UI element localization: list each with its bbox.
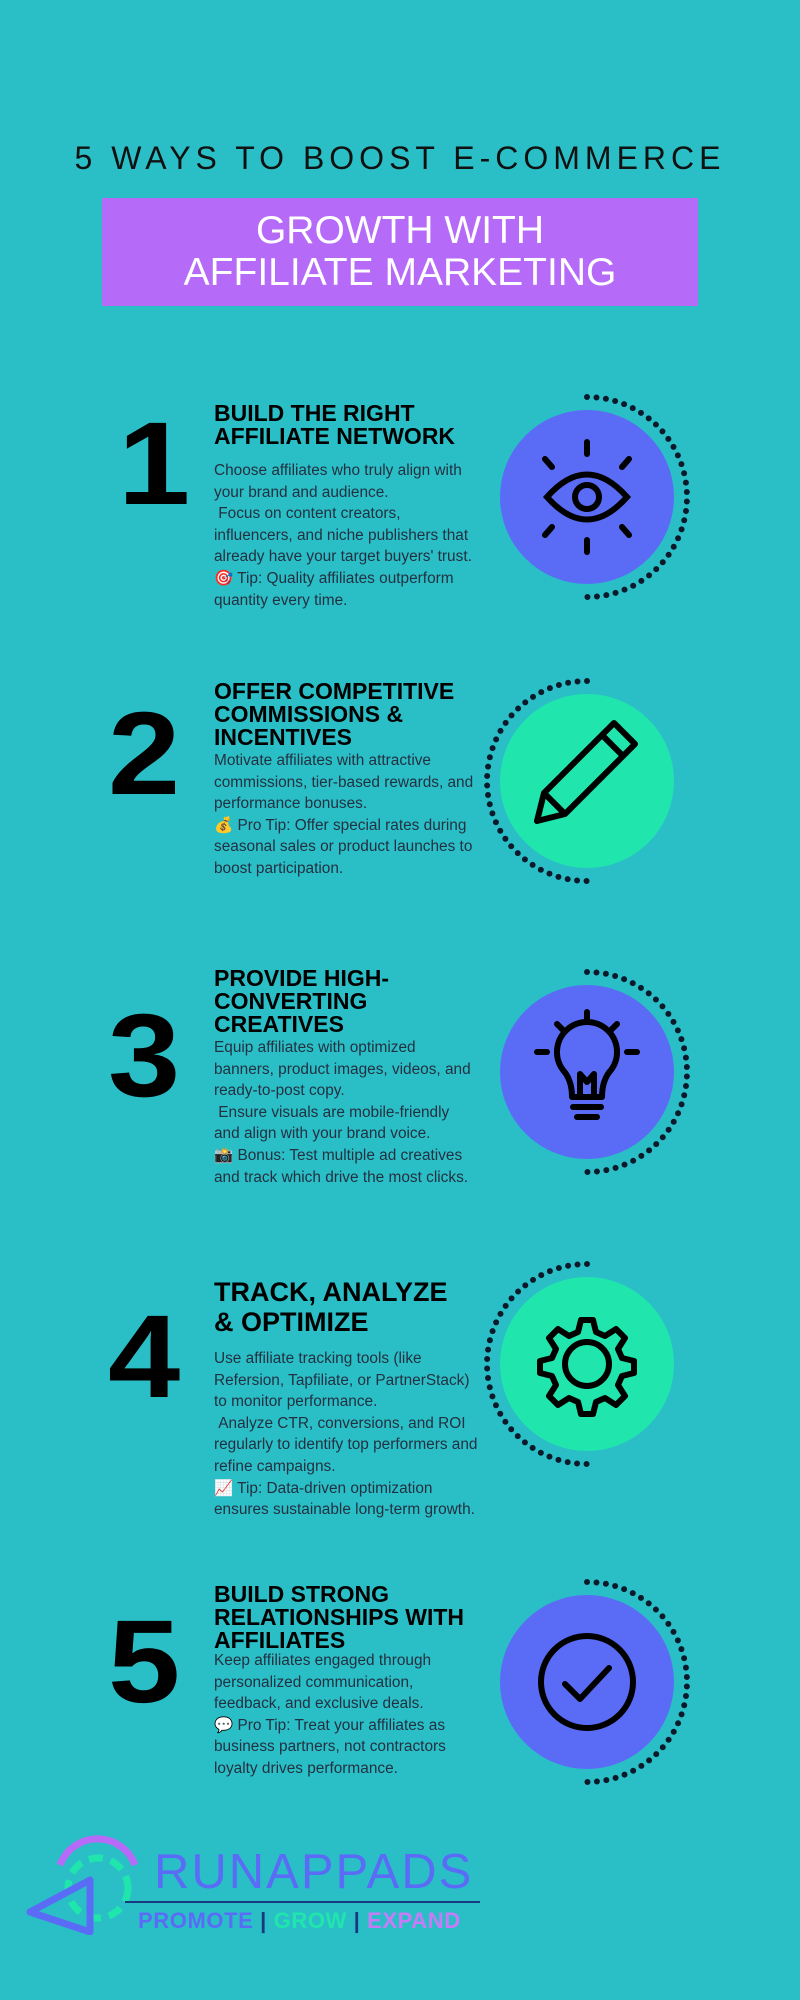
number 3: 3 <box>108 990 180 1122</box>
heading 5: AFFILIATES <box>214 1627 345 1653</box>
heading 5: RELATIONSHIPS WITH <box>214 1604 464 1630</box>
body 1: 🎯 Tip: Quality affiliates outperform quantity every time. <box>214 570 454 609</box>
section 1 <box>118 394 690 609</box>
heading 3 <box>214 965 389 1037</box>
title banner <box>102 198 698 306</box>
title banner: AFFILIATE MARKETING <box>184 251 616 294</box>
logo <box>26 1835 480 1935</box>
body 4: Use affiliate tracking tools (like Refersion, Tapfiliate, or PartnerStack) to monitor performance. <box>214 1350 470 1410</box>
heading 1: AFFILIATE NETWORK <box>214 423 455 449</box>
body 4 <box>214 1350 477 1518</box>
heading 2: OFFER COMPETITIVE <box>214 678 454 704</box>
logo wordmark: RUNAPPADS <box>154 1845 473 1899</box>
number 4: 4 <box>108 1291 180 1423</box>
body 2 <box>214 752 473 877</box>
heading 4 <box>214 1277 448 1337</box>
title line 1: 5 WAYS TO BOOST E-COMMERCE <box>75 140 725 176</box>
number 2: 2 <box>108 688 180 820</box>
heading 2: INCENTIVES <box>214 724 352 750</box>
icon: check <box>500 1579 690 1785</box>
section 2 <box>108 678 674 884</box>
heading 1 <box>214 400 455 449</box>
body 5: 💬 Pro Tip: Treat your affiliates as business partners, not contractors loyalty drives performance. <box>214 1717 446 1777</box>
section 4 <box>108 1261 674 1518</box>
body 2: 💰 Pro Tip: Offer special rates during seasonal sales or product launches to boost participation. <box>214 817 472 877</box>
logo icon <box>26 1835 138 1935</box>
heading 2 <box>214 678 454 750</box>
body 2: Motivate affiliates with attractive commissions, tier-based rewards, and performance bonuses. <box>214 752 473 812</box>
number 1: 1 <box>118 398 190 530</box>
section 5 <box>108 1579 690 1785</box>
number 5: 5 <box>108 1596 180 1728</box>
icon: pencil <box>484 678 674 884</box>
icon: gear <box>484 1261 674 1467</box>
heading 5: BUILD STRONG <box>214 1581 389 1607</box>
heading 5 <box>214 1581 464 1653</box>
body 4: 📈 Tip: Data-driven optimization ensures sustainable long-term growth. <box>214 1480 475 1518</box>
body 3 <box>214 1039 471 1186</box>
heading 3: PROVIDE HIGH- <box>214 965 389 991</box>
body 3: Equip affiliates with optimized banners, product images, videos, and ready-to-post copy. <box>214 1039 471 1099</box>
heading 2: COMMISSIONS & <box>214 701 403 727</box>
icon: lightbulb <box>500 969 690 1175</box>
body 5 <box>214 1652 446 1777</box>
section 3 <box>108 965 690 1186</box>
logo tagline: PROMOTE | GROW | EXPAND <box>138 1908 461 1933</box>
icon: eye <box>500 394 690 600</box>
body 3: 📸 Bonus: Test multiple ad creatives and track which drive the most clicks. <box>214 1147 468 1186</box>
heading 1: BUILD THE RIGHT <box>214 400 415 426</box>
heading 3: CONVERTING <box>214 988 367 1014</box>
body 1: Choose affiliates who truly align with your brand and audience. <box>214 462 462 501</box>
body 5: Keep affiliates engaged through personalized communication, feedback, and exclusive deals. <box>214 1652 431 1712</box>
title banner: GROWTH WITH <box>256 209 544 252</box>
body 1: Focus on content creators, influencers, and niche publishers that already have your target buyers' trust. <box>214 505 472 565</box>
body 4: Analyze CTR, conversions, and ROI regularly to identify top performers and refine campaigns. <box>214 1415 477 1475</box>
body 3: Ensure visuals are mobile-friendly and align with your brand voice. <box>214 1104 449 1142</box>
heading 4: TRACK, ANALYZE <box>214 1277 448 1307</box>
heading 3: CREATIVES <box>214 1011 344 1037</box>
body 1 <box>214 462 472 609</box>
heading 4: & OPTIMIZE <box>214 1307 368 1337</box>
